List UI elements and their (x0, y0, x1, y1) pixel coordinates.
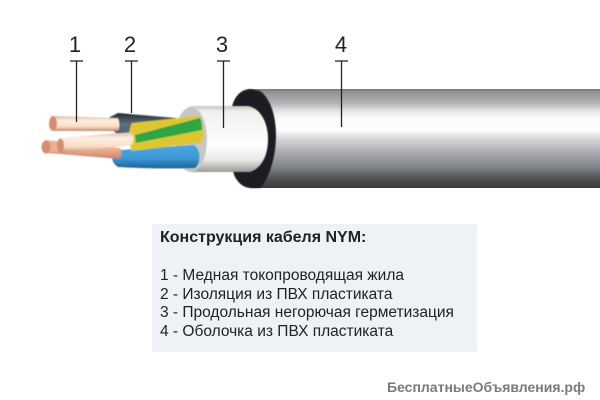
number 4: 4 (335, 32, 347, 57)
pointer 1 (70, 61, 83, 122)
pointer 2 (125, 61, 138, 113)
pointer 3 (217, 61, 230, 128)
number 2: 2 (124, 32, 136, 57)
legend item 4: 4 - Оболочка из ПВХ пластиката (160, 323, 393, 340)
number 3: 3 (216, 32, 228, 57)
copper wires (42, 116, 134, 159)
legend item 2: 2 - Изоляция из ПВХ пластиката (160, 286, 392, 303)
outer sheath (230, 89, 600, 188)
pointer 4 (335, 61, 348, 127)
legend item 3: 3 - Продольная негорючая герметизация (160, 304, 454, 321)
lower back wire (42, 140, 122, 159)
dark conductor insulation (109, 113, 176, 138)
insulated conductors (109, 113, 203, 168)
blue conductor insulation (112, 145, 199, 168)
number 1: 1 (69, 32, 81, 57)
front wire (57, 132, 134, 153)
watermark: БесплатныеОбъявления.рф (387, 379, 585, 395)
white filler layer (175, 106, 268, 172)
panel: cable legend (152, 224, 477, 352)
yellow-green conductor insulation (129, 116, 203, 151)
legend item 1: 1 - Медная токопроводящая жила (160, 267, 404, 284)
legend heading: Конструкция кабеля NYM: (160, 229, 366, 246)
upper wire (49, 116, 120, 131)
